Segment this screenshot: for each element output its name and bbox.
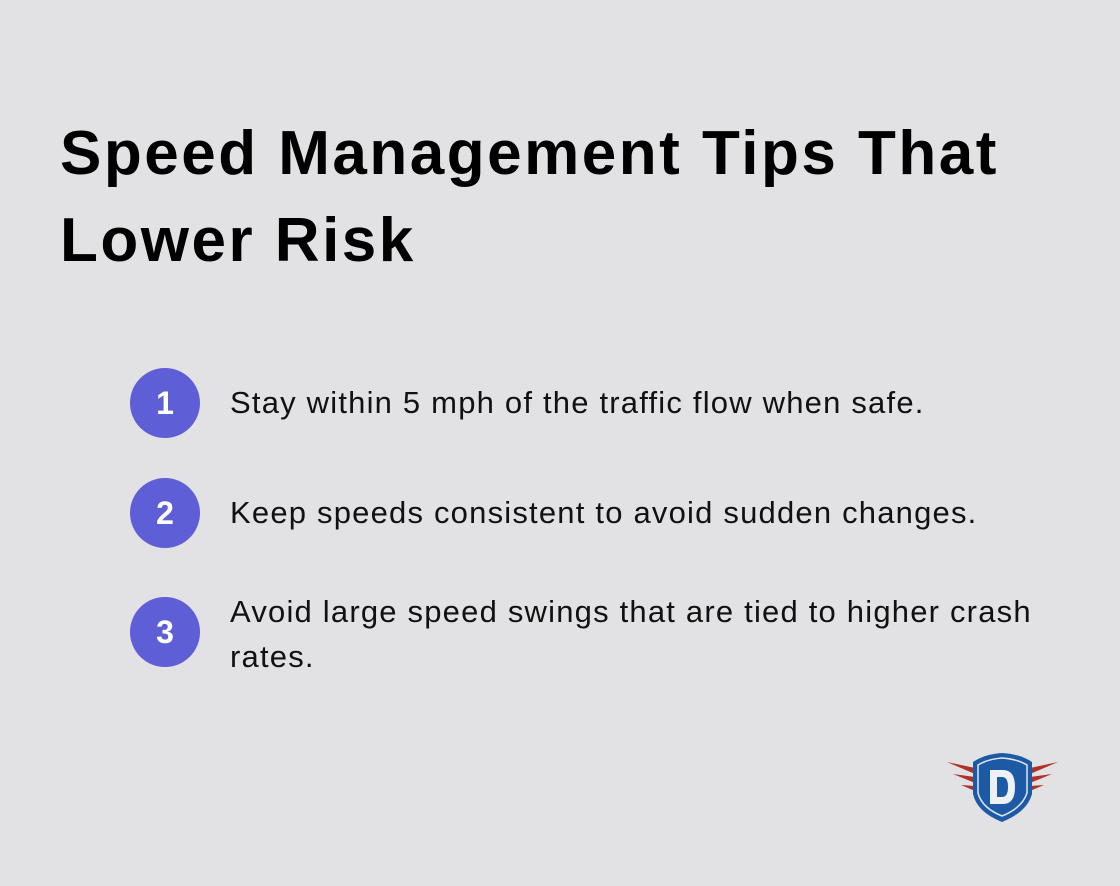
number 2: [130, 478, 200, 548]
item 2: [130, 478, 978, 548]
text 1: Stay within 5 mph of the traffic flow when safe.: [230, 385, 925, 420]
number 2: 2: [156, 495, 174, 531]
number 3: 3: [156, 614, 174, 650]
title: Speed Management Tips That: [60, 119, 999, 188]
icon: logo shield: [947, 753, 1058, 822]
item 3: [130, 594, 1032, 674]
item 1: [130, 368, 925, 438]
text 2: Keep speeds consistent to avoid sudden changes.: [230, 495, 978, 530]
number 1: [130, 368, 200, 438]
title: Lower Risk: [60, 206, 416, 275]
number 1: 1: [156, 385, 174, 421]
title: [60, 119, 999, 275]
number 3: [130, 597, 200, 667]
text 3: Avoid large speed swings that are tied to higher crash rates.: [230, 594, 1032, 674]
